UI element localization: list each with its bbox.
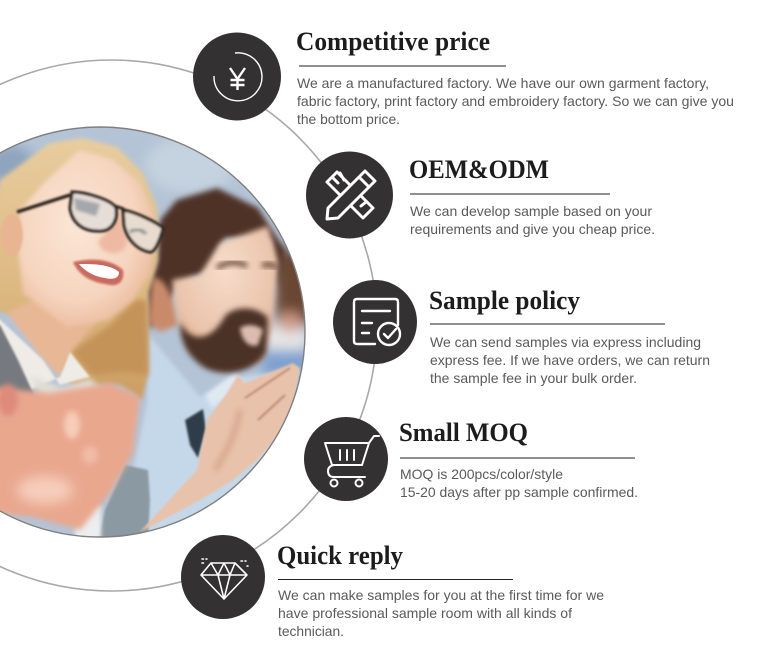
heading: Sample policy [429,286,580,315]
item: OEM and ODM [306,152,655,238]
woman's hair [0,138,158,400]
text block: MOQ is 200pcs/color/style [400,466,563,482]
man's ear [148,278,178,332]
text block: We are a manufactured factory. We have our own garment factory, [297,75,709,91]
woman's jacket, lower [98,465,150,540]
woman's collar [0,315,90,390]
man's eyes and brows [217,262,277,268]
item: small MOQ [304,417,638,501]
text block: have professional sample room with all kinds of [278,605,572,621]
man's hair [147,188,285,330]
man's hand [140,363,300,532]
white cloth at bottom [75,505,101,545]
text block [278,587,604,639]
man's face [172,226,278,370]
icon: crossed ruler and pencil [306,152,393,238]
woman's face [18,150,157,327]
text block: express fee. If we have orders, we can return [430,352,710,368]
woman's grey vest [0,324,34,394]
man's tie [185,409,206,458]
item: quick reply [181,535,604,639]
woman's glasses [17,192,163,252]
photo: smiling woman and man clapping [0,120,315,545]
heading: Small MOQ [399,418,528,447]
heading: Quick reply [277,541,403,570]
text block: fabric factory, print factory and embroidery factory. So we can give you [297,93,734,109]
text block [430,334,710,386]
man's beard [180,308,268,373]
woman's smile [73,260,123,285]
text block [410,203,655,237]
text block [297,75,734,127]
text block: the bottom price. [297,111,400,127]
icon: yen coin [193,32,281,120]
text block: We can make samples for you at the first time for we [278,587,604,603]
icon: document with check [333,280,417,364]
item: competitive price [193,27,734,127]
icon: shopping cart [304,417,388,501]
text block: We can send samples via express including [430,334,701,350]
woman's neck [7,300,100,377]
heading: Competitive price [296,27,490,56]
text block [400,466,638,500]
text block: the sample fee in your bulk order. [430,370,637,386]
woman's blurred clapping hand [0,383,140,530]
item: sample policy [333,280,710,386]
photo border [0,127,305,537]
text block: technician. [278,623,344,639]
text block: We can develop sample based on your [410,203,652,219]
icon: diamond [181,535,265,619]
outer ring [0,60,377,591]
man's shirt [134,338,300,530]
heading: OEM&ODM [409,155,549,184]
text block: 15-20 days after pp sample confirmed. [400,484,638,500]
text block: requirements and give you cheap price. [410,221,655,237]
